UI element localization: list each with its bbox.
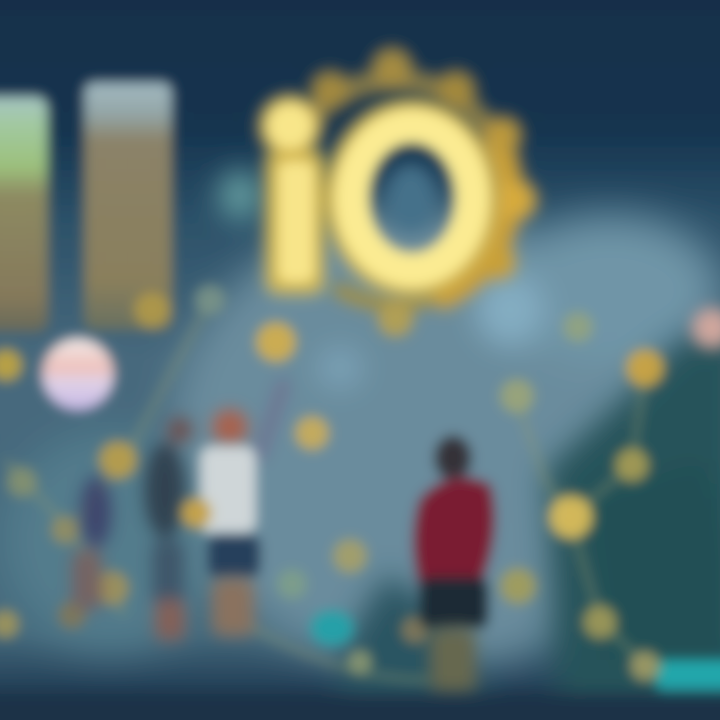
ground [312, 684, 720, 720]
head [212, 409, 248, 445]
globe backdrop [0, 210, 720, 670]
corner glow [692, 308, 720, 348]
gear ring [298, 48, 536, 334]
big number 10 [260, 96, 480, 294]
globe highlights [220, 171, 544, 388]
digit i stem [268, 104, 314, 282]
right hills [340, 320, 720, 720]
jacket [414, 478, 494, 585]
person: left figure [72, 476, 112, 610]
trousers [420, 578, 488, 628]
legs [430, 628, 476, 694]
head [435, 436, 471, 480]
digit 0 ring [352, 126, 472, 270]
striped ball [42, 338, 114, 410]
legs [212, 578, 254, 636]
teal accents [310, 610, 720, 692]
glowing node on figure [181, 498, 211, 528]
digit glow [260, 96, 480, 294]
network nodes [0, 285, 664, 681]
centre tower [84, 82, 172, 330]
raised arm [258, 380, 285, 460]
digit 0 centre [387, 165, 435, 233]
person: white shirt figure [200, 380, 285, 636]
network lines [5, 300, 645, 680]
person: red jacket figure [414, 436, 494, 694]
shorts [208, 535, 260, 577]
left tower [0, 96, 48, 332]
shirt [200, 446, 256, 534]
person: middle dark figure [144, 417, 193, 640]
